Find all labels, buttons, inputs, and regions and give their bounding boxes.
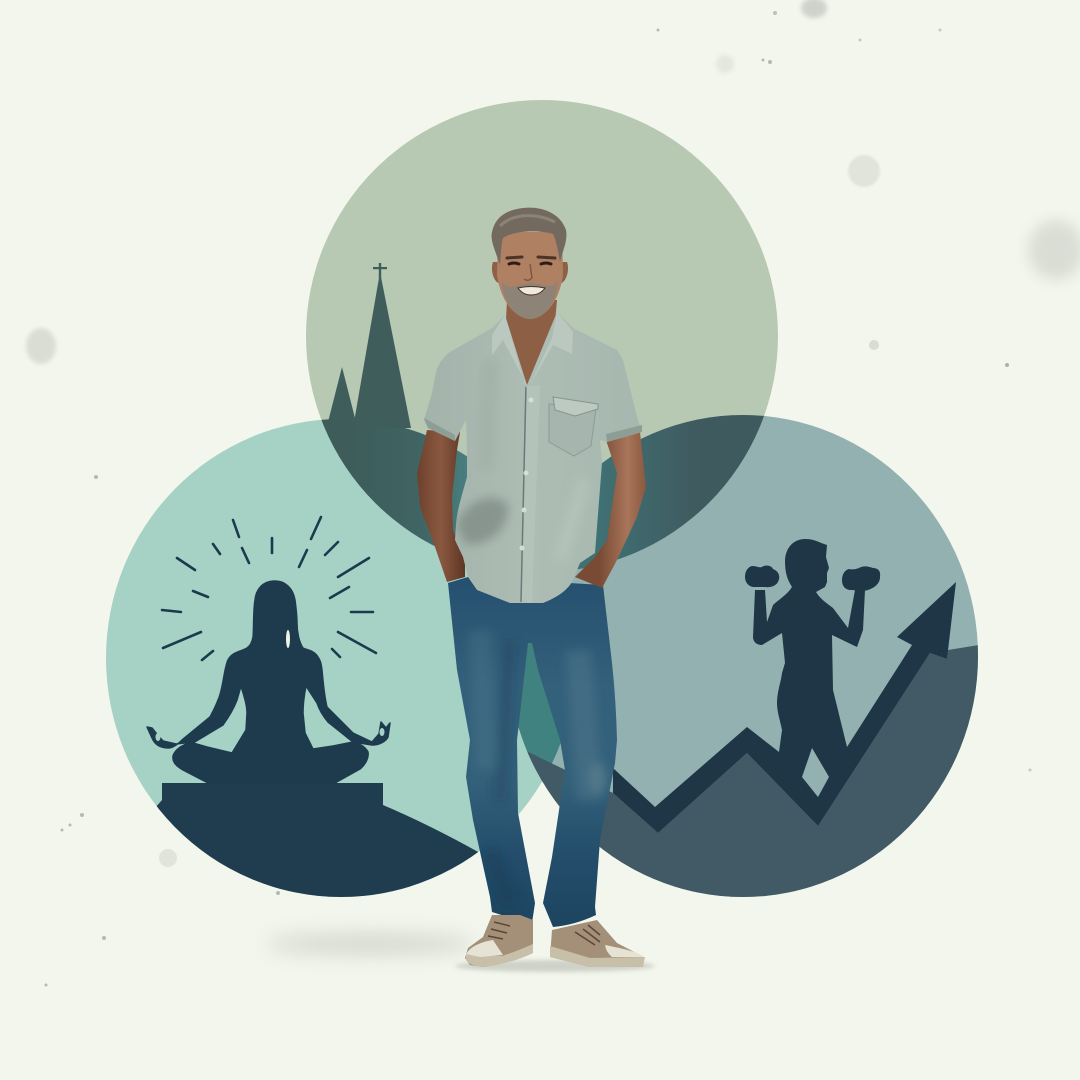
jeans — [448, 577, 617, 927]
icon: meditating figure — [147, 581, 390, 783]
hair highlight — [500, 216, 555, 226]
smile — [518, 286, 545, 295]
shirt pocket — [549, 397, 598, 456]
shirt placket and buttons — [520, 384, 540, 603]
overlap: left and right — [518, 643, 560, 782]
shirt collar — [492, 312, 573, 388]
ground shadow — [265, 933, 655, 972]
nose — [524, 264, 532, 280]
right shoe — [550, 920, 644, 967]
overlap: top and right — [577, 415, 764, 570]
shoe toes and soles — [466, 940, 645, 967]
icon: church steeple — [328, 263, 411, 428]
hill: left circle base — [156, 783, 478, 897]
left shoe — [465, 915, 533, 967]
shirt folds and shadow — [456, 494, 512, 548]
eyes and brows — [507, 257, 555, 258]
hill: right circle base — [520, 644, 985, 900]
circle: body (right) — [508, 415, 978, 897]
overlap: top and left — [322, 419, 467, 546]
right arm with hand — [575, 432, 646, 588]
neck and chest — [505, 300, 557, 388]
beard — [502, 280, 558, 319]
jeans fading and folds — [480, 630, 606, 905]
eye sockets — [509, 263, 551, 264]
face — [497, 232, 563, 319]
shoe laces — [488, 922, 600, 945]
icon: dumbbell figure with growth arrow — [613, 539, 956, 833]
ears — [492, 262, 568, 283]
man standing — [417, 208, 646, 967]
icon: radiating mind lines — [162, 517, 376, 660]
shirt — [424, 312, 642, 603]
hair — [492, 208, 566, 265]
circle: spirit (top) — [306, 100, 778, 572]
sleeve cuffs — [424, 418, 642, 442]
circle: mind (left) — [106, 419, 576, 897]
left arm with hand — [417, 430, 465, 582]
